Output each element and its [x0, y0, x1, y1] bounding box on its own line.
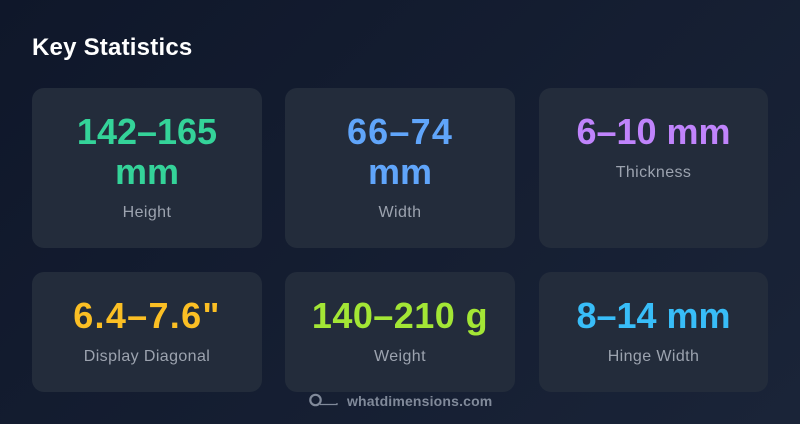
panel: thickness [539, 88, 768, 248]
label: display diagonal: Display Diagonal [84, 348, 210, 365]
value: height: 142–165 [77, 111, 217, 152]
panel: display diagonal [32, 272, 262, 392]
value: hinge width: 8–14 mm [576, 295, 731, 336]
value: height: mm [115, 151, 179, 192]
label: hinge width: Hinge Width [608, 348, 699, 365]
footer brand [309, 393, 492, 409]
label: height: Height [123, 204, 171, 221]
label: weight: Weight [374, 348, 426, 365]
value: width: mm [368, 151, 432, 192]
title: Key Statistics [32, 34, 192, 61]
value: width [347, 111, 453, 192]
icon: tape measure [309, 394, 338, 406]
panel: weight [285, 272, 515, 392]
value: thickness: 6–10 mm [576, 111, 731, 152]
label: width: Width [379, 204, 421, 221]
panel: hinge width [539, 272, 768, 392]
value: width: 66–74 [347, 111, 453, 152]
value: height [77, 111, 217, 192]
panel: height [32, 88, 262, 248]
value: display diagonal: 6.4–7.6" [73, 295, 221, 336]
label: thickness: Thickness [616, 164, 691, 181]
value: weight: 140–210 g [312, 295, 488, 336]
footer text: whatdimensions.com [347, 393, 492, 409]
panel: width [285, 88, 515, 248]
